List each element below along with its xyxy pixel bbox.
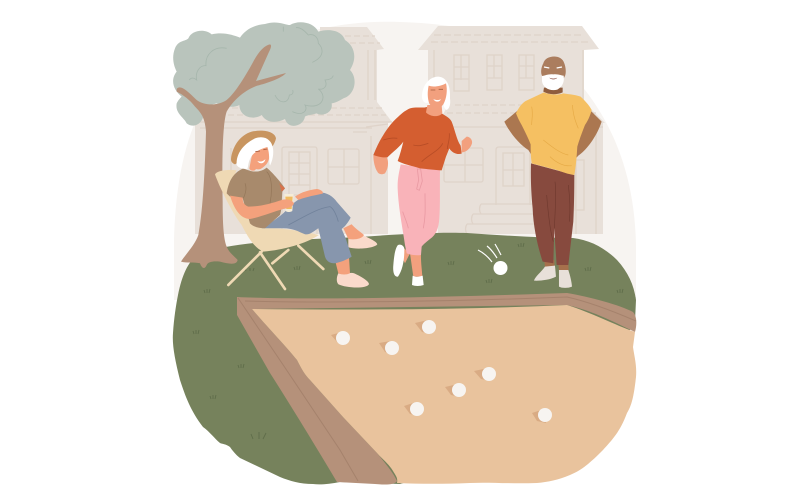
tree trunk [177,44,286,268]
bocce balls on court [336,320,552,422]
shirt [227,168,285,228]
folding chair legs [228,246,323,289]
left house [195,27,392,234]
bocce court border [237,293,636,485]
back leg and shoe [400,245,410,263]
face [428,83,447,108]
lawn [173,233,636,484]
hand on knee [295,189,323,200]
yellow shirt [516,92,592,175]
shoes [534,266,556,281]
white beard [542,74,564,90]
seated woman in chair [215,131,377,289]
white hair [237,137,273,169]
glass of juice [284,194,294,212]
chair seat [215,170,319,252]
background blob [174,22,636,300]
smile [433,99,441,102]
ball shadows [331,320,546,423]
jeans [262,192,352,263]
neck [426,105,442,116]
rolling ball with motion lines [478,244,508,275]
grass tufts [193,243,623,439]
hair [422,77,450,110]
arm holding glass [230,196,294,219]
front leg [410,253,422,277]
tree canopy [173,22,355,126]
neck and face [249,142,270,171]
pink trousers [398,164,440,255]
orange sweater [373,107,462,170]
right house [418,26,605,234]
left hand [373,155,388,174]
shoes [348,236,377,249]
arms [504,110,541,161]
ankles [544,260,569,271]
court border lines [238,297,636,481]
smile and eyes [257,159,265,163]
lower legs [335,224,364,275]
head [541,56,566,82]
hat [231,131,276,164]
brown trousers [531,163,574,265]
standing man [504,56,602,288]
front shoe [412,276,424,286]
bowling woman [373,77,472,286]
sand court [252,305,636,484]
canopy curls [189,27,333,113]
right fist [462,137,472,152]
tree [173,22,355,268]
mouth and brows [549,78,557,79]
neck [543,88,563,94]
